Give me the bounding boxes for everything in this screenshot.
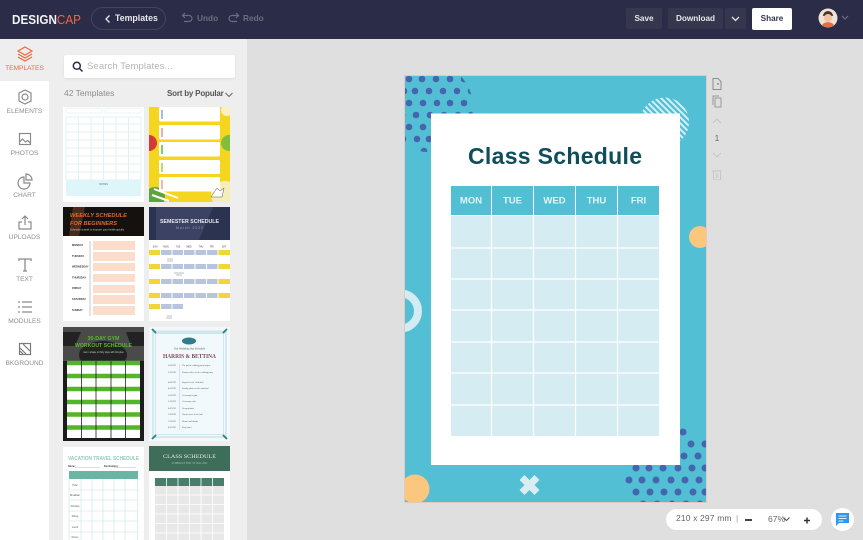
zoom value: 67% [768,514,785,524]
thumbnail: wedding day schedule: 8:30 PM [168,427,176,429]
thumbnail: semester schedule: SEMESTER SCHEDULE [160,219,219,225]
thumbnail: vacation travel schedule: Lunch [72,527,79,529]
thumbnail: weekly schedule for beginners: MONDAY [72,243,84,247]
thumbnail: weekly schedule for beginners: WEEKLY SCHEDULE [70,213,128,219]
zoom control bar: | [736,513,738,523]
thumbnail: wedding day schedule: Ceremony begins [182,394,198,397]
schedule table header [451,186,659,215]
nav: modules [8,301,41,325]
schedule table header: WED [543,196,566,206]
thumbnail: wedding day schedule: 7:00 PM [168,414,176,416]
thumbnail: wedding day schedule: 3:30 PM [168,372,176,374]
thumbnail: vacation travel schedule: Name: [68,465,76,468]
thumbnail: class schedule green: CLASS SCHEDULE [163,454,217,460]
nav: background: BKGROUND [5,360,44,367]
thumbnail: blank timetable: NOTES [99,183,108,186]
nav: uploads [9,215,40,241]
thumbnail: weekly schedule for beginners: TUESDAY [72,254,84,258]
thumbnail: semester schedule: March 2022 [176,226,203,230]
thumbnail: semester schedule: SAT [222,246,227,248]
sort control: Sort by Popular [167,89,224,98]
thumbnail: wedding day schedule [149,327,230,441]
save button [626,8,662,29]
decoration: top-left dots [405,76,473,152]
thumbnail: gym workout schedule: WORKOUT SCHEDULE [75,343,132,349]
download menu button [725,8,746,29]
thumbnail: wedding day schedule: 5:00 PM [168,395,176,397]
thumbnail: vacation travel schedule: Hotel [72,484,78,487]
thumbnail: wedding day schedule: HARRIS & BETTINA [163,354,217,360]
share button: Share [761,14,783,22]
decoration: bottom-right dots [626,428,708,508]
thumbnail: gym workout schedule: 30-DAY GYM [88,336,120,342]
thumbnail: wedding day schedule: Our Wedding Day Schedule [174,348,206,350]
decoration: striped circle [642,98,689,141]
nav: elements: ELEMENTS [7,108,42,115]
thumbnail: class schedule green [149,446,230,540]
templates back button [91,7,166,30]
templates back button: Templates [115,13,158,23]
nav: elements [7,90,42,115]
nav: text [16,258,33,283]
thumbnail: wedding day schedule: Guests move to the hall [182,414,203,416]
thumbnail: semester schedule: MON [163,246,169,248]
schedule table header: THU [587,196,606,206]
thumbnail: yellow schedule [149,107,230,202]
template panel [49,39,247,540]
thumbnail: blank timetable [63,107,144,202]
schedule table header: TUE [503,196,522,206]
thumbnail: weekly schedule for beginners: SUNDAY [72,308,83,312]
save button: Save [634,14,654,23]
thumbnail: weekly schedule for beginners [63,207,144,321]
thumbnail: wedding day schedule: 6:00 PM [168,408,176,410]
thumbnail: semester schedule: WED [186,246,192,248]
page toolbar [712,78,722,180]
thumbnail: semester schedule: FRI [210,246,214,248]
thumbnail: vacation travel schedule: Dining [72,516,79,518]
nav: photos [11,132,38,157]
chat button [831,508,854,531]
search box [64,55,235,78]
thumbnail: wedding day schedule: 4:30 PM [168,388,176,390]
download button: Download [676,14,715,23]
undo: Undo [197,13,218,23]
thumbnail: weekly schedule for beginners: FRIDAY [72,286,82,290]
thumbnail: weekly schedule for beginners: SATURDAY [72,297,86,301]
nav: templates [0,39,49,81]
zoom control bar [666,509,822,530]
share button [752,8,792,30]
decoration: white cross [522,478,537,492]
nav: modules: MODULES [8,318,41,325]
thumbnail: wedding day schedule: 5:30 PM [168,401,176,403]
zoom minus [745,519,752,520]
thumbnail: vacation travel schedule: Breakfast [70,494,80,497]
zoom plus [804,518,810,524]
decoration: bottom-left orange circle [400,474,430,504]
thumbnail: semester schedule: SUN [153,246,158,248]
thumbnail: wedding day schedule: 7:30 PM [168,421,176,423]
schedule table header: MON [460,196,482,206]
schedule table header: FRI [631,196,646,206]
thumbnail: weekly schedule for beginners: Schedule a week to improve your health quickly [70,228,125,232]
thumbnail: wedding day schedule: Party time! [182,427,192,429]
thumbnail: wedding day schedule: 3:00 PM [168,365,176,367]
thumbnail: wedding day schedule: Ceremony ends [182,401,196,403]
nav: chart: CHART [13,192,36,199]
thumbnail: weekly schedule for beginners: FOR BEGINNERS [70,221,117,227]
thumbnail: wedding day schedule: Family photos at the cathedral [182,388,209,390]
search box: Search Templates... [87,61,173,72]
thumbnail: class schedule green: SCHEDULE FOR: SY 2021-2022 [172,462,208,465]
schedule table body [451,216,659,436]
nav: text: TEXT [16,276,33,283]
thumbnail: wedding day schedule: Group photos [182,408,194,410]
decoration: left white ring [383,294,418,328]
top bar [0,0,863,39]
thumbnail: vacation travel schedule: Activities [70,505,80,508]
thumbnail: semester schedule: TUE [176,246,181,248]
page number: 1 [715,134,719,143]
undo [182,12,218,23]
left navigation rail [0,39,49,540]
thumbnail: vacation travel schedule: Dinner [72,536,79,539]
thumbnail: wedding day schedule: Reports to the Cathedral [182,382,204,384]
thumbnail: semester schedule: THU [199,246,204,248]
thumbnail: weekly schedule for beginners: THURSDAY [72,276,86,280]
thumbnail: wedding day schedule: Dinner and drinks [182,421,198,423]
redo [228,12,264,23]
template count: 42 Templates [64,88,114,98]
redo: Redo [243,13,264,23]
decoration: right orange circle [689,226,711,248]
title: Class Schedule [468,143,642,169]
download button [668,8,723,29]
paper size: 210 x 297 mm [676,513,732,523]
nav: uploads: UPLOADS [9,234,40,241]
thumbnail: vacation travel schedule: Destination: [104,465,119,468]
nav: background [5,342,44,367]
user avatar [818,8,848,28]
thumbnail: wedding day schedule: 4:00 PM [168,382,176,384]
design canvas page [404,75,707,503]
nav: chart [13,173,36,199]
nav: photos: PHOTOS [11,150,38,157]
thumbnail: gym workout schedule: Get in shape in thirty days with this plan [83,351,124,354]
white schedule sheet [431,114,680,465]
nav: templates: TEMPLATES [5,65,44,72]
thumbnail: semester schedule [149,207,230,321]
thumbnail: gym workout schedule [63,327,144,441]
thumbnail: wedding day schedule: Pictures taken of the wedding party [182,371,214,374]
thumbnail: vacation travel schedule [63,447,144,540]
thumbnail: wedding day schedule: The quick wedding party begins [182,364,210,367]
page outline [404,76,706,502]
logo: DESIGNCAP [12,12,81,27]
thumbnail: weekly schedule for beginners: WEDNESDAY [72,264,89,268]
